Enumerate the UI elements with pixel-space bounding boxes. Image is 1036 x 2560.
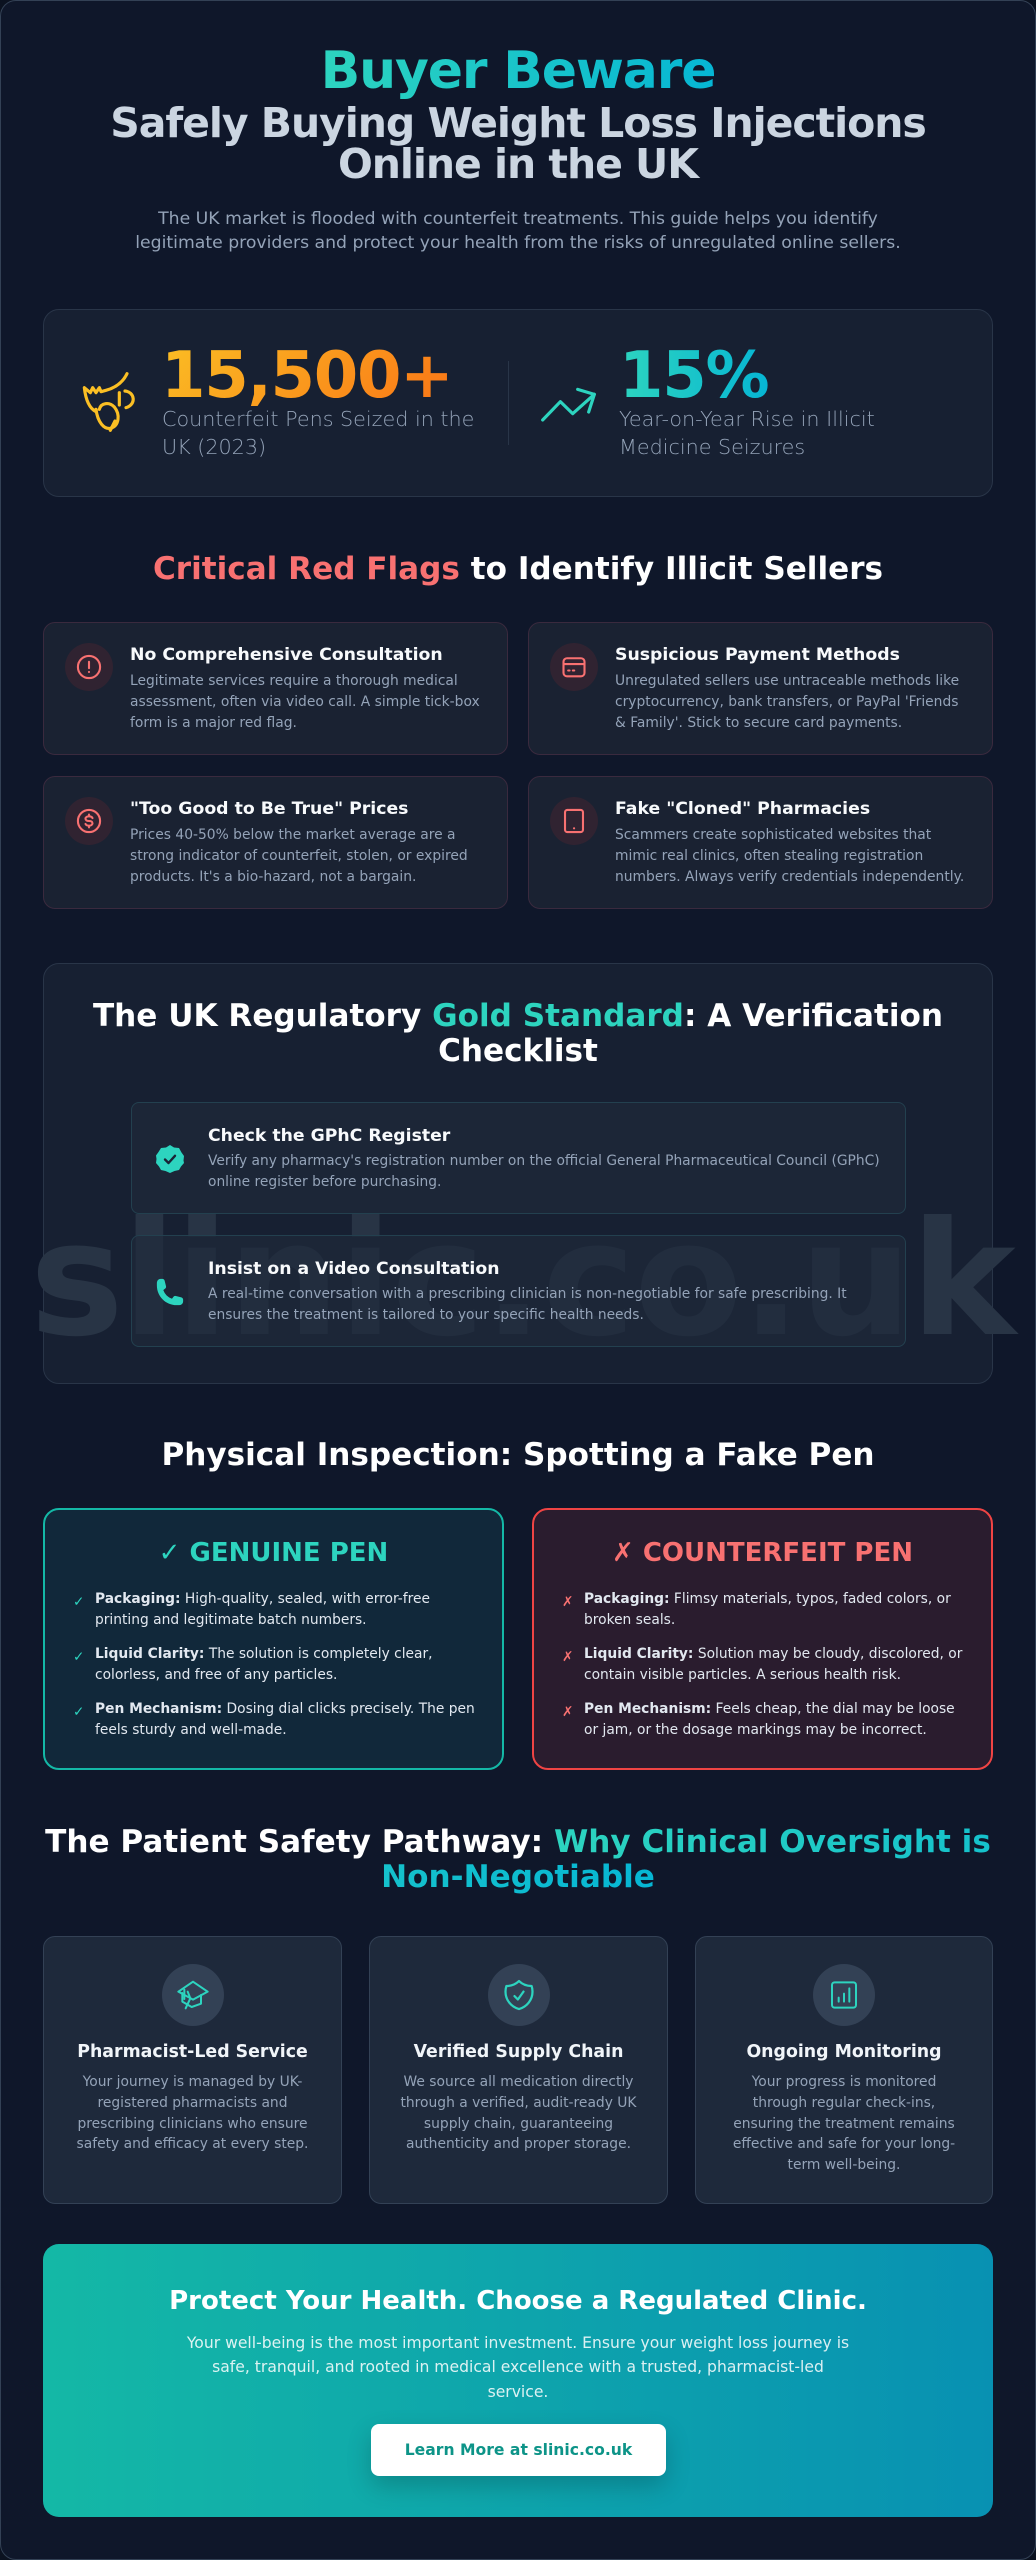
- icon: credit card: [550, 643, 598, 691]
- flag text: & Family'. Stick to secure card payments.: [615, 715, 902, 731]
- list: genuine points: colorless, and free of any particles.: [95, 1667, 337, 1683]
- flag text: [615, 673, 959, 731]
- card text: [77, 2074, 308, 2152]
- item text: online register before purchasing.: [208, 1174, 441, 1190]
- heading: regulatory: [93, 998, 943, 1069]
- checklist item: GPhC register: [131, 1102, 906, 1214]
- flag title: Suspicious Payment Methods: [615, 645, 900, 665]
- list: counterfeit points: ✗: [562, 1704, 573, 1720]
- flag text: [130, 673, 480, 731]
- panel: pharmacist-led service: [43, 1936, 342, 2204]
- heading: regulatory: Checklist: [438, 1033, 598, 1069]
- flag text: form is a major red flag.: [130, 715, 297, 731]
- card text: prescribing clinicians who ensure: [77, 2116, 308, 2132]
- flag text: assessment, often via video call. A simple tick-box: [130, 694, 480, 710]
- flag text: [615, 827, 964, 885]
- heading: physical inspection: Physical Inspection: Spotting a Fake Pen: [161, 1437, 875, 1473]
- CTA text: [186, 2334, 849, 2401]
- stat: seizures rise label: [619, 407, 875, 459]
- list: counterfeit points: Pen Mechanism: Feels cheap, the dial may be loose: [584, 1701, 955, 1717]
- item text: [208, 1286, 847, 1323]
- list: genuine points: Packaging: High-quality, sealed, with error-free: [95, 1591, 430, 1607]
- panel: genuine pen: [43, 1508, 504, 1770]
- item text: [208, 1153, 880, 1190]
- list: genuine points: Pen Mechanism: Dosing dial clicks precisely. The pen: [95, 1701, 475, 1717]
- stat: pens seized label: UK (2023): [162, 435, 266, 459]
- card text: authenticity and proper storage.: [406, 2136, 631, 2152]
- card text: [400, 2074, 637, 2152]
- list: genuine points: ✓: [73, 1649, 84, 1665]
- list: genuine points: printing and legitimate batch numbers.: [95, 1612, 367, 1628]
- list: counterfeit points: or jam, or the dosage markings may be incorrect.: [584, 1722, 927, 1738]
- panel: call to action: [43, 2244, 993, 2517]
- CTA text: safe, tranquil, and rooted in medical excellence with a trusted, pharmacist-led: [212, 2358, 824, 2376]
- icon: badge check: [156, 1145, 184, 1173]
- icon: dollar: [65, 797, 113, 845]
- stat: seizures rise label: Medicine Seizures: [619, 435, 805, 459]
- icon: phone device: [550, 797, 598, 845]
- card text: through a verified, audit-ready UK: [400, 2095, 637, 2111]
- icon: alert: [65, 643, 113, 691]
- CTA button: Learn More at slinic.co.uk: [405, 2441, 632, 2459]
- card text: Your journey is managed by UK-: [83, 2074, 302, 2090]
- panel: counterfeit pen: [532, 1508, 993, 1770]
- intro text: [135, 209, 901, 253]
- flag text: Prices 40-50% below the market average are a: [130, 827, 456, 843]
- list: counterfeit points: ✗: [562, 1594, 573, 1610]
- stat: seizures rise label: Year-on-Year Rise in Illicit: [619, 407, 875, 431]
- card text: through regular check-ins,: [753, 2095, 935, 2111]
- flag text: Legitimate services require a thorough medical: [130, 673, 458, 689]
- flag text: products. It's a bio-hazard, not a bargain.: [130, 869, 416, 885]
- list: counterfeit points: Liquid Clarity: Solution may be cloudy, discolored, or: [584, 1646, 962, 1662]
- subtitle: Safely Buying Weight Loss Injections: [110, 99, 926, 147]
- card text: [733, 2074, 955, 2173]
- panel heading: ✗ COUNTERFEIT PEN: [612, 1538, 913, 1568]
- subtitle: Online in the UK: [338, 140, 698, 188]
- intro text: The UK market is flooded with counterfeit treatments. This guide helps you identify: [158, 209, 878, 229]
- card text: term well-being.: [788, 2157, 900, 2173]
- list: counterfeit points: [562, 1591, 962, 1738]
- heading: patient safety pathway: The Patient Safety Pathway: Why Clinical Oversight is: [45, 1824, 991, 1860]
- card title: Pharmacist-Led Service: [77, 2042, 308, 2062]
- item title: Check the GPhC Register: [208, 1126, 450, 1146]
- icon: phone: [156, 1278, 184, 1306]
- flag text: mimic real clinics, often stealing registration: [615, 848, 923, 864]
- stat: pens seized label: Counterfeit Pens Seized in the: [162, 407, 474, 431]
- panel heading: ✓ GENUINE PEN: [159, 1538, 388, 1568]
- CTA button: [371, 2424, 666, 2476]
- panel: ongoing monitoring: [695, 1936, 993, 2204]
- flag text: [130, 827, 468, 885]
- card text: effective and safe for your long-: [733, 2136, 955, 2152]
- flag text: cryptocurrency, bank transfers, or PayPal 'Friends: [615, 694, 958, 710]
- flag text: strong indicator of counterfeit, stolen, or expired: [130, 848, 468, 864]
- list: genuine points: ✓: [73, 1704, 84, 1720]
- stat: pens seized label: [162, 407, 474, 459]
- stat: pens seized value: 15,500+: [161, 339, 452, 413]
- icon: graduation cap: [162, 1964, 224, 2026]
- list: genuine points: [73, 1591, 475, 1738]
- heading: red flags: Critical Red Flags to Identify Illicit Sellers: [153, 551, 883, 587]
- flag title: "Too Good to Be True" Prices: [130, 799, 408, 819]
- flag text: Scammers create sophisticated websites that: [615, 827, 931, 843]
- panel: regulatory checklist: [43, 963, 993, 1384]
- list: genuine points: ✓: [73, 1594, 84, 1610]
- flag title: No Comprehensive Consultation: [130, 645, 443, 665]
- icon: shield check: [488, 1964, 550, 2026]
- card text: registered pharmacists and: [97, 2095, 288, 2111]
- CTA text: service.: [488, 2383, 548, 2401]
- list: genuine points: feels sturdy and well-made.: [95, 1722, 287, 1738]
- flag text: numbers. Always verify credentials independently.: [615, 869, 964, 885]
- stat: seizures rise value: 15%: [619, 339, 768, 413]
- panel: key statistics: [43, 309, 993, 497]
- checklist item: video consultation: [131, 1235, 906, 1347]
- card title: Ongoing Monitoring: [746, 2042, 942, 2062]
- icon: chart: [813, 1964, 875, 2026]
- panel: payment methods: [528, 622, 993, 755]
- card text: Your progress is monitored: [752, 2074, 936, 2090]
- intro text: legitimate providers and protect your health from the risks of unregulated online sellers.: [135, 233, 901, 253]
- heading: patient safety pathway: [45, 1824, 991, 1895]
- list: genuine points: Liquid Clarity: The solution is completely clear,: [95, 1646, 433, 1662]
- panel: cloned pharmacies: [528, 776, 993, 909]
- icon: hand holding pen: [82, 372, 135, 432]
- item text: Verify any pharmacy's registration number on the official General Pharmaceutical Council (GPhC): [208, 1153, 880, 1169]
- panel: verified supply chain: [369, 1936, 668, 2204]
- list: counterfeit points: ✗: [562, 1649, 573, 1665]
- title: Buyer Beware: [321, 41, 715, 101]
- flag title: Fake "Cloned" Pharmacies: [615, 799, 870, 819]
- subtitle: [110, 99, 926, 188]
- panel: too good prices: [43, 776, 508, 909]
- list: counterfeit points: Packaging: Flimsy materials, typos, faded colors, or: [584, 1591, 951, 1607]
- CTA text: Your well-being is the most important investment. Ensure your weight loss journey is: [187, 2334, 849, 2352]
- divider: [508, 361, 509, 445]
- icon: trending up: [541, 388, 596, 422]
- flag text: Unregulated sellers use untraceable methods like: [615, 673, 959, 689]
- item title: Insist on a Video Consultation: [208, 1259, 499, 1279]
- heading: regulatory: The UK Regulatory Gold Standard: A Verification: [93, 998, 943, 1034]
- list: counterfeit points: broken seals.: [584, 1612, 675, 1628]
- heading: patient safety pathway: Non-Negotiable: [381, 1859, 655, 1895]
- CTA heading: Protect Your Health. Choose a Regulated Clinic.: [169, 2286, 867, 2316]
- panel: no consultation: [43, 622, 508, 755]
- card title: Verified Supply Chain: [414, 2042, 623, 2062]
- card text: ensuring the treatment remains: [733, 2116, 955, 2132]
- list: counterfeit points: contain visible particles. A serious health risk.: [584, 1667, 901, 1683]
- item text: A real-time conversation with a prescribing clinician is non-negotiable for safe prescribing. It: [208, 1286, 847, 1302]
- watermark: slinic.co.uk: [30, 1188, 1014, 1372]
- card text: supply chain, guaranteeing: [424, 2116, 613, 2132]
- card text: We source all medication directly: [403, 2074, 634, 2090]
- item text: ensures the treatment is tailored to your specific health needs.: [208, 1307, 644, 1323]
- card text: safety and efficacy at every step.: [77, 2136, 308, 2152]
